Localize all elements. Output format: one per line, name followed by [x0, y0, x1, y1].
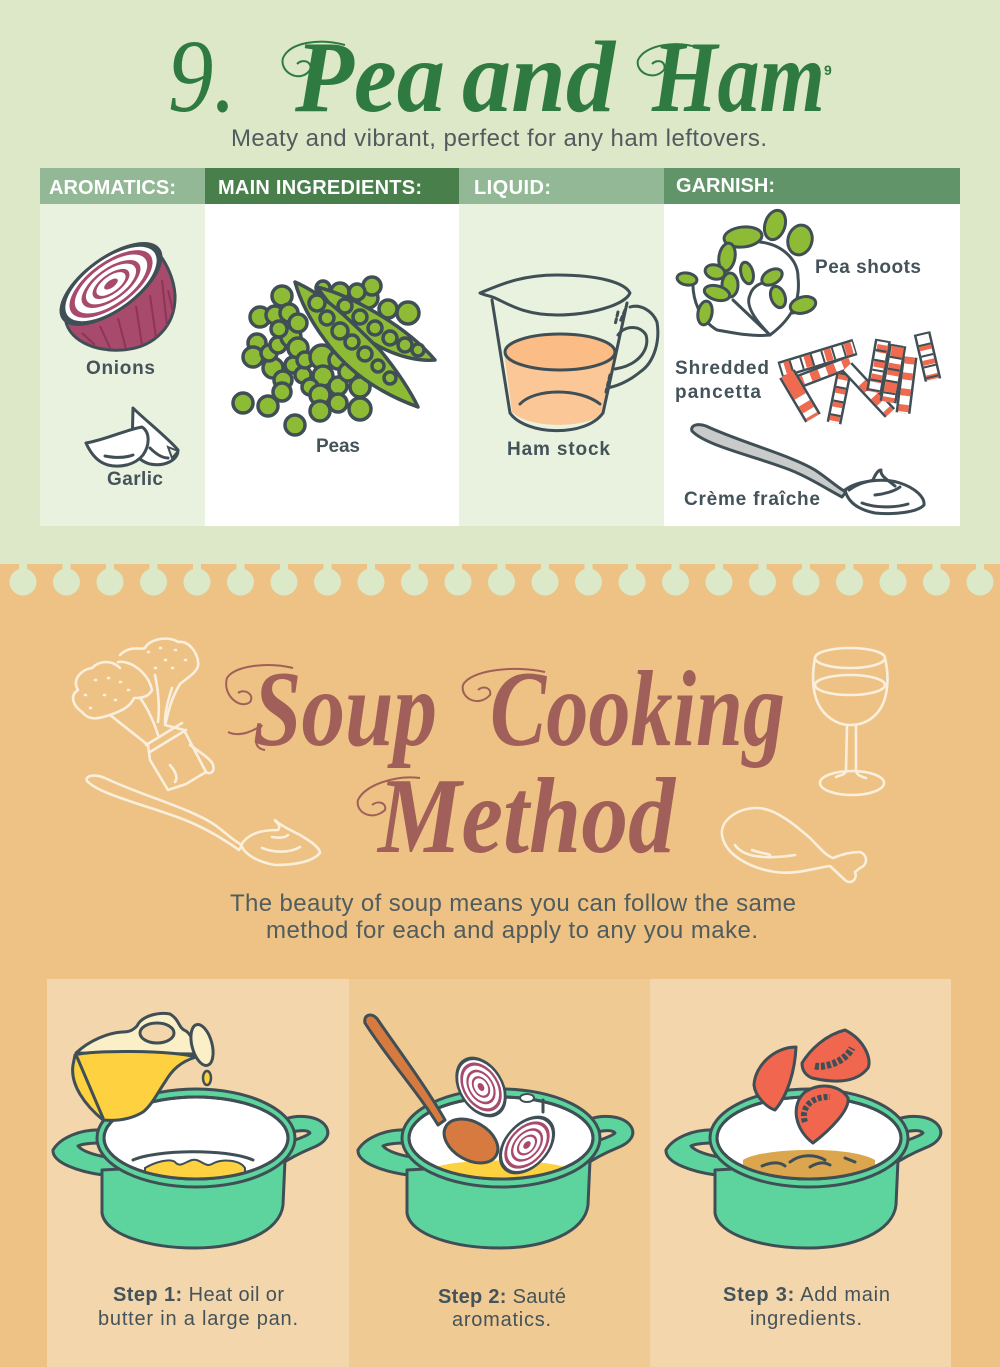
title: Ham [651, 21, 825, 134]
panel: liquid [459, 168, 664, 526]
subtitle: Meaty and vibrant, perfect for any ham leftovers. [231, 125, 767, 152]
section heading: soup cooking method: Method [376, 757, 677, 876]
icon: garlic [86, 408, 178, 466]
step 2 text [438, 1286, 566, 1331]
icon: pot with tomatoes [666, 1030, 941, 1248]
section description: method for each and apply to any you make. [266, 917, 758, 944]
section heading: soup cooking method: Cooking [490, 650, 785, 769]
icon: chicken drumstick outline [722, 808, 866, 882]
icon: wine glass outline [813, 648, 887, 795]
step 2 text: Step 2: Sauté [438, 1286, 566, 1308]
step 3 text [723, 1284, 890, 1330]
step 1 text: butter in a large pan. [98, 1308, 298, 1330]
label: peas: Peas [316, 436, 360, 457]
background: green upper section [0, 0, 1000, 564]
label: shredded pancetta: pancetta [675, 382, 761, 403]
step 2 text: aromatics. [452, 1309, 551, 1331]
section description [230, 890, 796, 944]
background: orange lower section [0, 564, 1000, 1367]
panel: garnish: GARNISH: [676, 175, 775, 197]
section heading: soup cooking method: Soup [253, 650, 437, 769]
panel: step 2 [349, 979, 650, 1367]
panel: main ingredients: MAIN INGREDIENTS: [218, 177, 422, 199]
panel: main ingredients [205, 168, 459, 526]
icon: broccoli outline [73, 639, 213, 790]
panel: liquid: LIQUID: [474, 177, 551, 199]
title: 9. [168, 19, 236, 134]
icon: spoon with creme fraiche [692, 425, 924, 514]
icon: spoon with cream outline [87, 776, 320, 865]
icon: peas [233, 277, 435, 435]
step 3 text: Step 3: Add main [723, 1284, 890, 1306]
title: 9 [824, 62, 832, 78]
label: creme fraiche: Crème fraîche [684, 489, 820, 510]
label: ham stock: Ham stock [507, 439, 610, 460]
label: pea shoots: Pea shoots [815, 257, 921, 278]
step 3 text: ingredients. [750, 1308, 862, 1330]
step 1 text: Step 1: Heat oil or [113, 1284, 284, 1306]
title: Pea [294, 21, 445, 134]
icon: onion [50, 229, 175, 350]
icon: pancetta strips [780, 333, 933, 423]
step 1 text [98, 1284, 298, 1330]
label: shredded pancetta: Shredded [675, 358, 769, 379]
panel: aromatics [40, 168, 205, 526]
icon: measuring jug of ham stock [480, 275, 658, 431]
title: and [462, 21, 617, 134]
section description: The beauty of soup means you can follow the same [230, 890, 796, 917]
scalloped hole-punch edge [10, 563, 994, 596]
panel: aromatics: AROMATICS: [49, 177, 176, 199]
label: onions: Onions [86, 358, 155, 379]
title [168, 19, 832, 134]
panel: step 1 [47, 979, 349, 1367]
section heading: soup cooking method [226, 650, 785, 876]
icon: pot with oil [53, 1013, 328, 1248]
panel: step 3 [650, 979, 951, 1367]
label: garlic: Garlic [107, 469, 163, 490]
icon: pea shoots [676, 208, 818, 335]
panel: garnish [664, 168, 960, 526]
icon: pot with spoon and onion [358, 1015, 633, 1248]
label: shredded pancetta [675, 358, 769, 403]
